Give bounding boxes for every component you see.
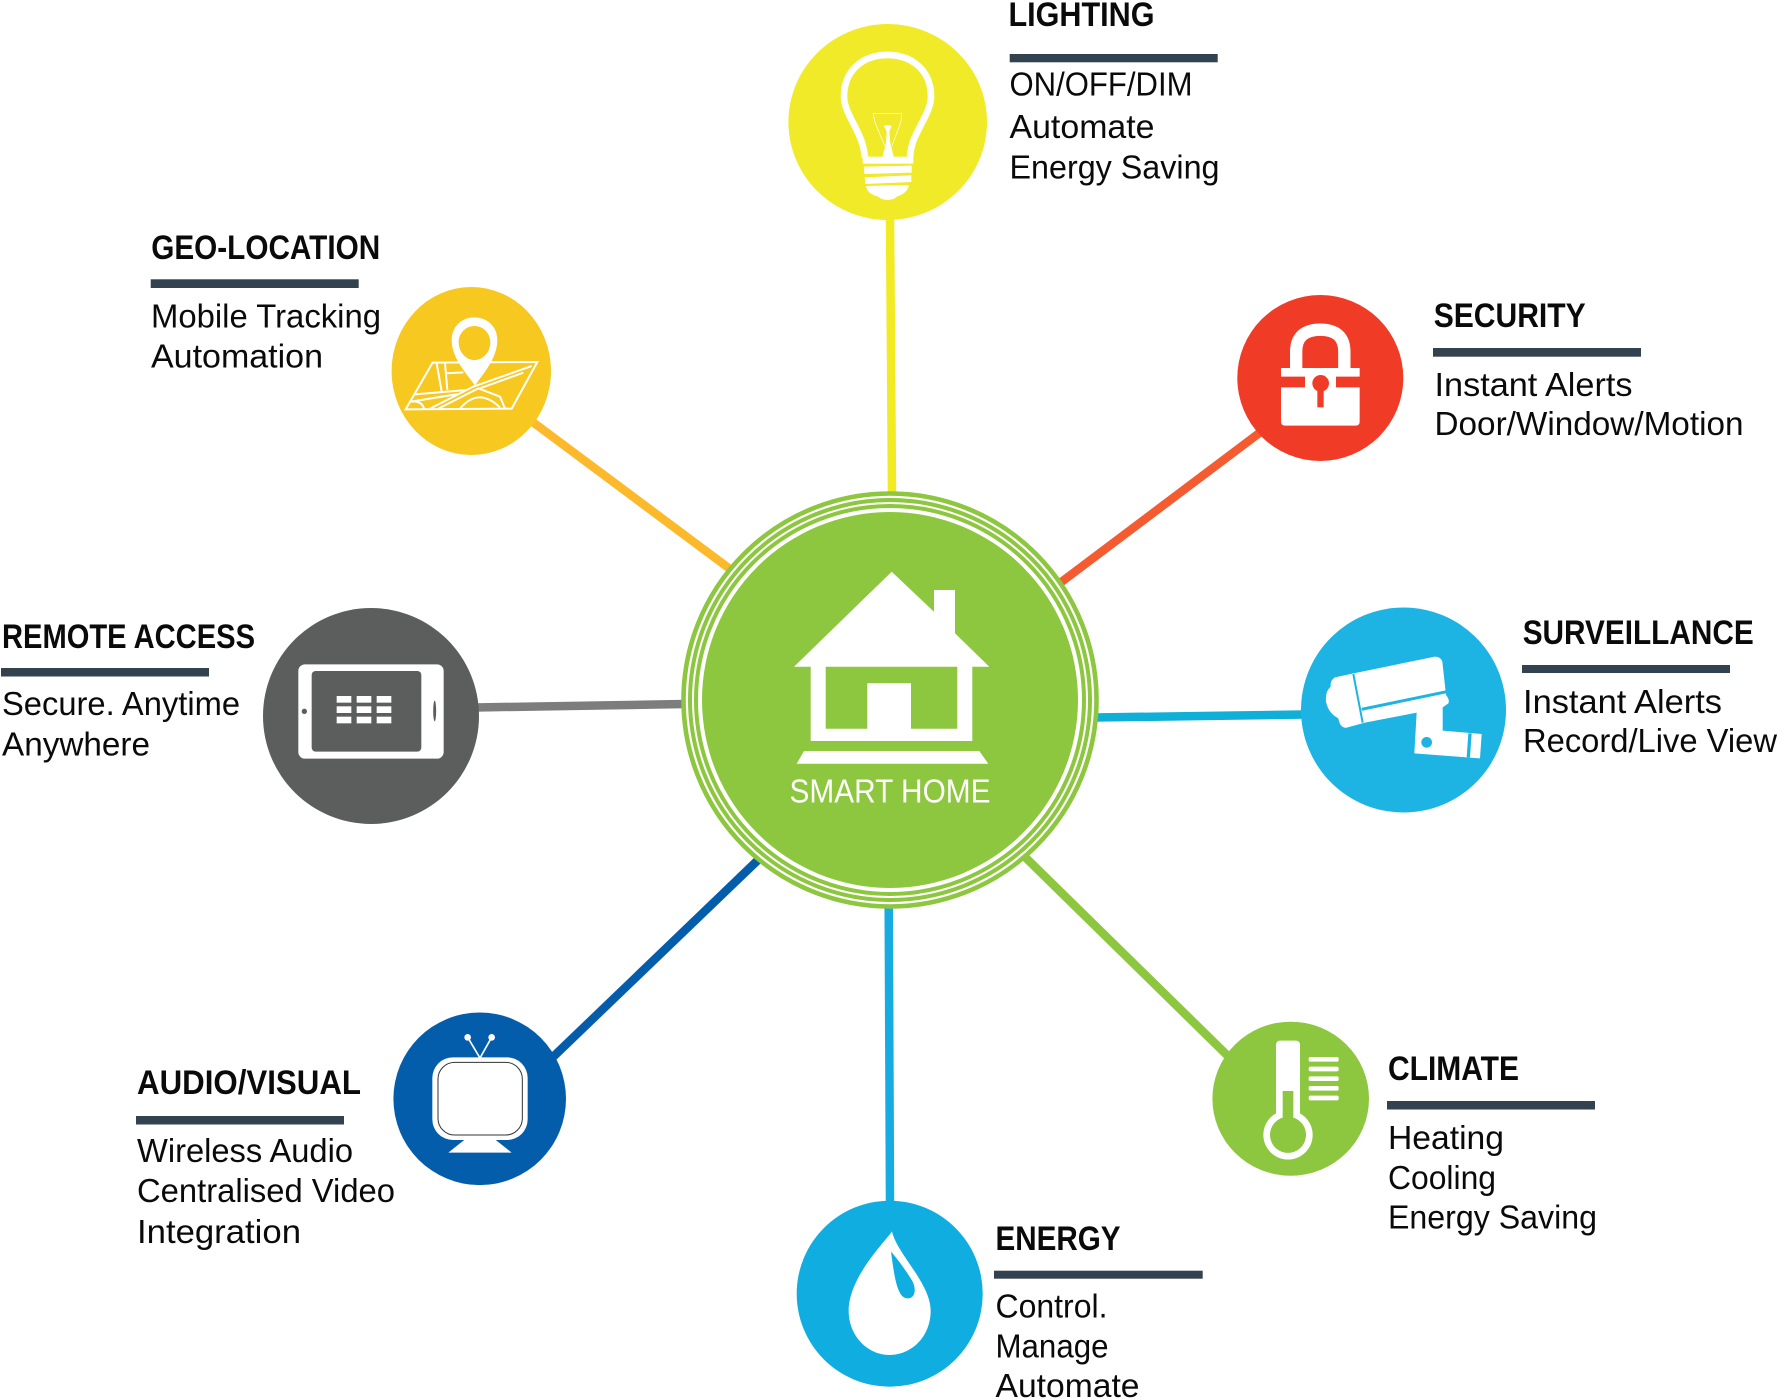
text block bbox=[1434, 366, 1744, 442]
icon: map pin bbox=[406, 317, 537, 409]
text block: Wireless Audio bbox=[137, 1132, 353, 1169]
text block: Automation bbox=[151, 338, 323, 375]
icon: water drop bbox=[849, 1231, 931, 1355]
text block: Mobile Tracking bbox=[151, 297, 381, 334]
panel: climate bbox=[1212, 1022, 1597, 1236]
text block: ON/OFF/DIM bbox=[1010, 66, 1192, 103]
icon: house bbox=[794, 572, 989, 764]
heading: AUDIO/VISUAL bbox=[137, 1064, 361, 1102]
text block bbox=[2, 685, 240, 762]
icon: light bulb bbox=[844, 55, 931, 200]
connector lines bbox=[475, 215, 1305, 1205]
text block bbox=[1388, 1119, 1597, 1236]
heading: CLIMATE bbox=[1388, 1050, 1519, 1088]
panel: security bbox=[1237, 295, 1744, 461]
heading: GEO-LOCATION bbox=[151, 229, 380, 267]
panel: remote access bbox=[1, 608, 479, 824]
text block: Centralised Video bbox=[137, 1172, 395, 1209]
text block: Anywhere bbox=[2, 726, 150, 762]
text block: Control. bbox=[996, 1288, 1108, 1325]
text block bbox=[1010, 66, 1220, 185]
text block: Instant Alerts bbox=[1523, 683, 1722, 720]
text block bbox=[1523, 683, 1777, 759]
text block: Record/Live View bbox=[1523, 722, 1777, 759]
text block: Door/Window/Motion bbox=[1434, 405, 1744, 442]
text block: Automate bbox=[1010, 108, 1154, 145]
panel: lighting bbox=[788, 0, 1220, 220]
heading: REMOTE ACCESS bbox=[2, 618, 255, 656]
text block: Energy Saving bbox=[1010, 148, 1220, 185]
icon: tablet bbox=[298, 664, 444, 759]
icon: padlock bbox=[1281, 330, 1360, 426]
text block: Instant Alerts bbox=[1434, 366, 1632, 403]
icon: television bbox=[432, 1034, 528, 1153]
heading: SECURITY bbox=[1434, 297, 1586, 335]
icon: security camera bbox=[1326, 657, 1482, 758]
panel: geo-location bbox=[151, 229, 551, 455]
text block: Manage bbox=[996, 1328, 1108, 1365]
central hub: smart home bbox=[684, 494, 1096, 906]
panel: surveillance bbox=[1301, 608, 1777, 812]
text block bbox=[151, 297, 381, 375]
panel: audio/visual bbox=[136, 1013, 566, 1250]
text block: Energy Saving bbox=[1388, 1198, 1597, 1236]
text block: Cooling bbox=[1388, 1159, 1496, 1196]
icon: thermometer bbox=[1263, 1041, 1339, 1160]
text block: Integration bbox=[137, 1213, 301, 1250]
text block bbox=[996, 1288, 1140, 1399]
hub label: SMART HOME bbox=[790, 772, 990, 810]
text block: Secure. Anytime bbox=[2, 685, 240, 722]
panel: energy bbox=[797, 1201, 1203, 1399]
heading: ENERGY bbox=[996, 1220, 1121, 1258]
text block: Heating bbox=[1388, 1119, 1504, 1156]
text block bbox=[137, 1132, 395, 1250]
